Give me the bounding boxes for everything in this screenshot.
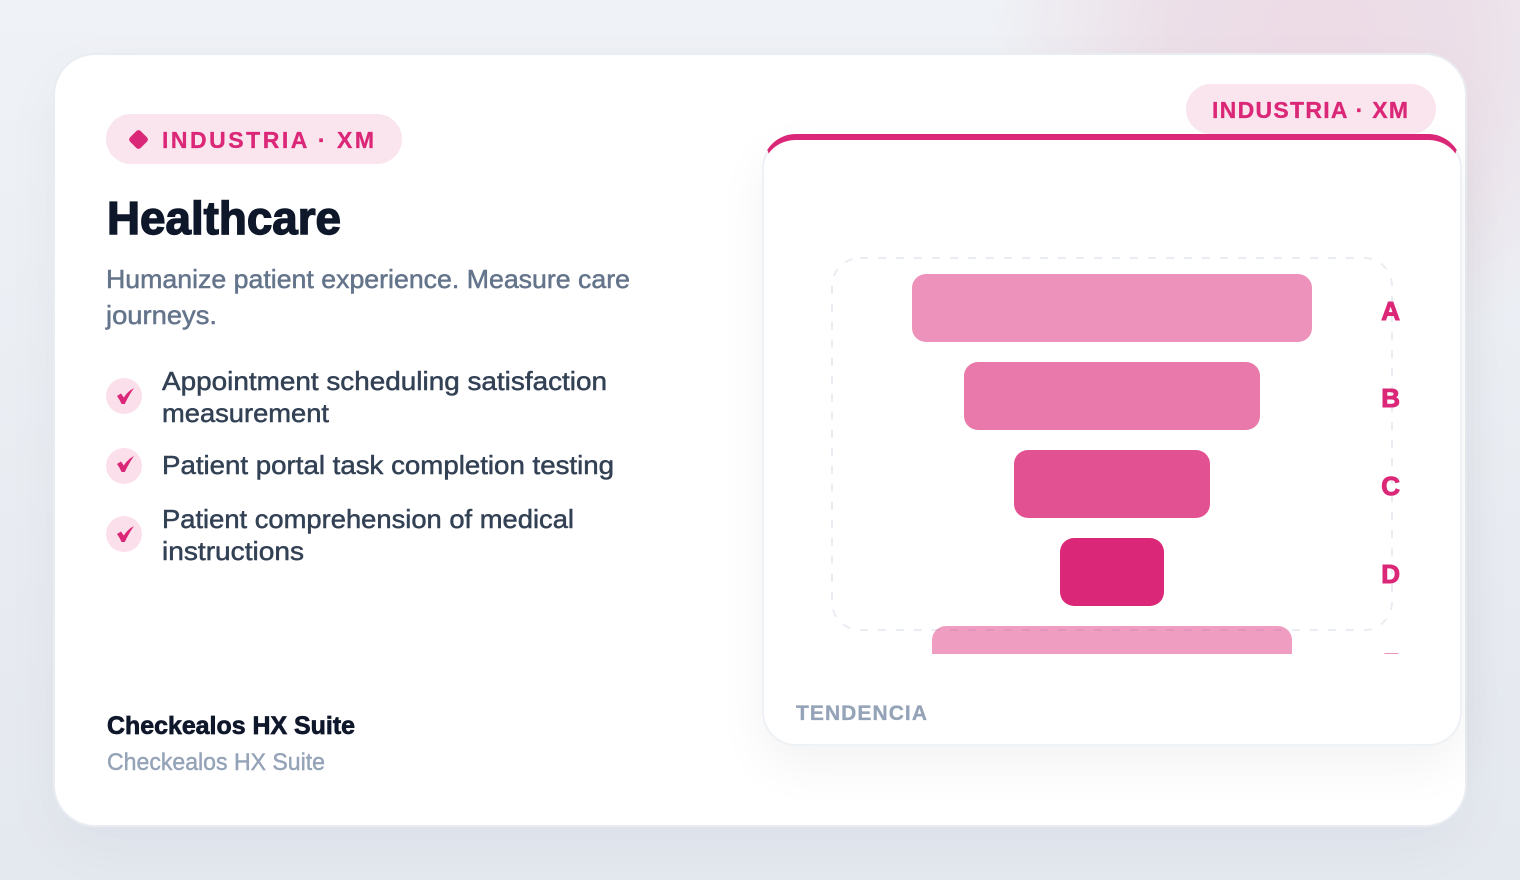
bar D: D	[1381, 559, 1400, 589]
bar D	[1060, 538, 1400, 606]
panel: funnel chart	[762, 134, 1462, 746]
feature list	[106, 366, 614, 566]
bar E (clipped): E	[1383, 648, 1400, 678]
bar B: B	[1381, 383, 1400, 413]
description: Humanize patient experience. Measure care	[106, 264, 630, 294]
bar C	[1014, 450, 1400, 518]
feature 3	[106, 504, 574, 566]
footer brand: Checkealos HX Suite	[107, 749, 325, 776]
footer brand	[107, 712, 355, 776]
feature 3: instructions	[162, 536, 304, 566]
bar C: C	[1381, 471, 1400, 501]
description: journeys.	[105, 300, 217, 330]
badge: industry: INDUSTRIA · XM	[162, 127, 374, 153]
left column	[105, 114, 630, 776]
bar A	[912, 274, 1400, 342]
funnel chart	[832, 258, 1400, 694]
feature 2: Patient portal task completion testing	[162, 450, 614, 480]
bar E (clipped)	[932, 626, 1398, 654]
caption: trend: TENDENCIA	[796, 702, 927, 725]
badge: industry	[106, 114, 402, 164]
feature 3: Patient comprehension of medical	[162, 504, 574, 534]
heading: Healthcare	[107, 192, 341, 244]
feature 2	[106, 448, 614, 484]
feature 1	[106, 366, 607, 428]
feature 1: Appointment scheduling satisfaction	[162, 366, 607, 396]
description	[105, 264, 630, 330]
bar B	[964, 362, 1400, 430]
feature 1: measurement	[162, 398, 330, 428]
bar A: A	[1381, 296, 1400, 326]
badge: top right	[1186, 84, 1436, 134]
badge: top right: INDUSTRIA · XM	[1212, 97, 1408, 123]
footer brand: Checkealos HX Suite	[107, 712, 355, 740]
